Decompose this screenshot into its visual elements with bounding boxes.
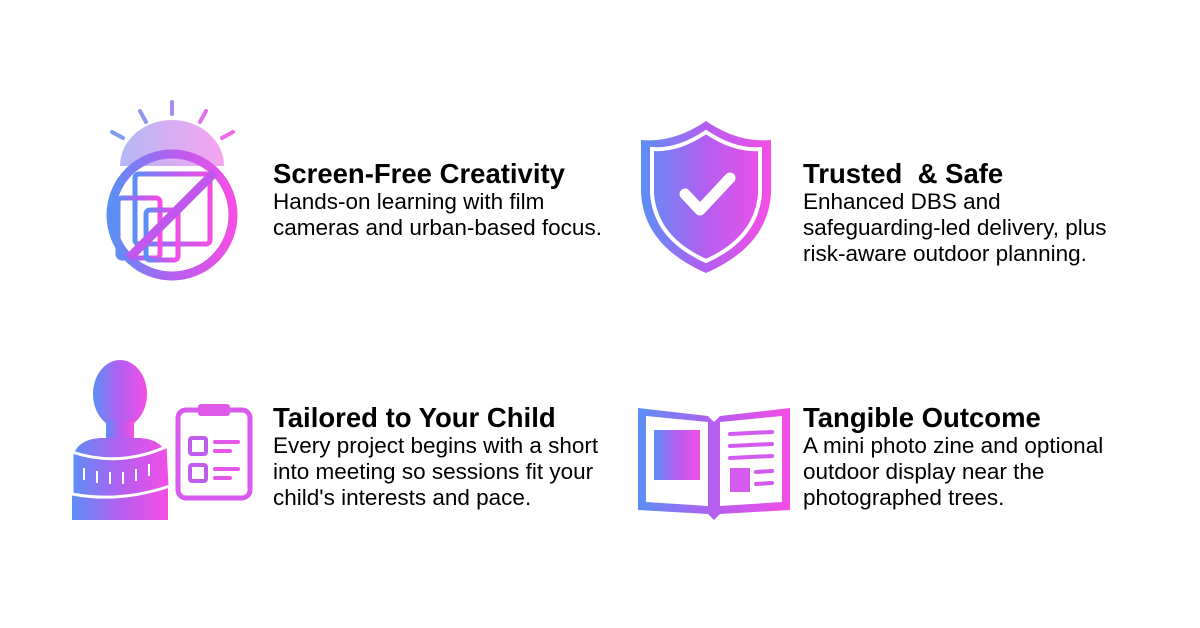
text: trusted: safeguarding-led delivery, plus [803, 215, 1107, 240]
text: screen-free: Hands-on learning with film [273, 189, 544, 214]
text: tangible: Tangible Outcome [803, 402, 1041, 433]
text: tangible [803, 402, 1103, 510]
text: trusted: risk-aware outdoor planning. [803, 241, 1087, 266]
text: tangible: A mini photo zine and optional [803, 433, 1103, 458]
text: trusted: Trusted & Safe [803, 158, 1003, 189]
text: tailored: into meeting so sessions fit your [273, 459, 593, 484]
text: trusted: Enhanced DBS and [803, 189, 1001, 214]
text: tangible: outdoor display near the [803, 459, 1044, 484]
text: screen-free: Screen-Free Creativity [273, 158, 565, 189]
text: trusted [803, 158, 1107, 266]
icon: shield [641, 121, 771, 273]
text: tailored [273, 402, 598, 510]
text: screen-free: cameras and urban-based focus. [273, 215, 602, 240]
text: tangible: photographed trees. [803, 485, 1004, 510]
text: tailored: child's interests and pace. [273, 485, 531, 510]
text: tailored: Every project begins with a short [273, 433, 598, 458]
icon: no screens [106, 100, 238, 280]
text: tailored: Tailored to Your Child [273, 402, 556, 433]
text: screen-free [273, 158, 602, 240]
icon: child measure checklist [72, 360, 252, 520]
icon: book [638, 408, 790, 520]
